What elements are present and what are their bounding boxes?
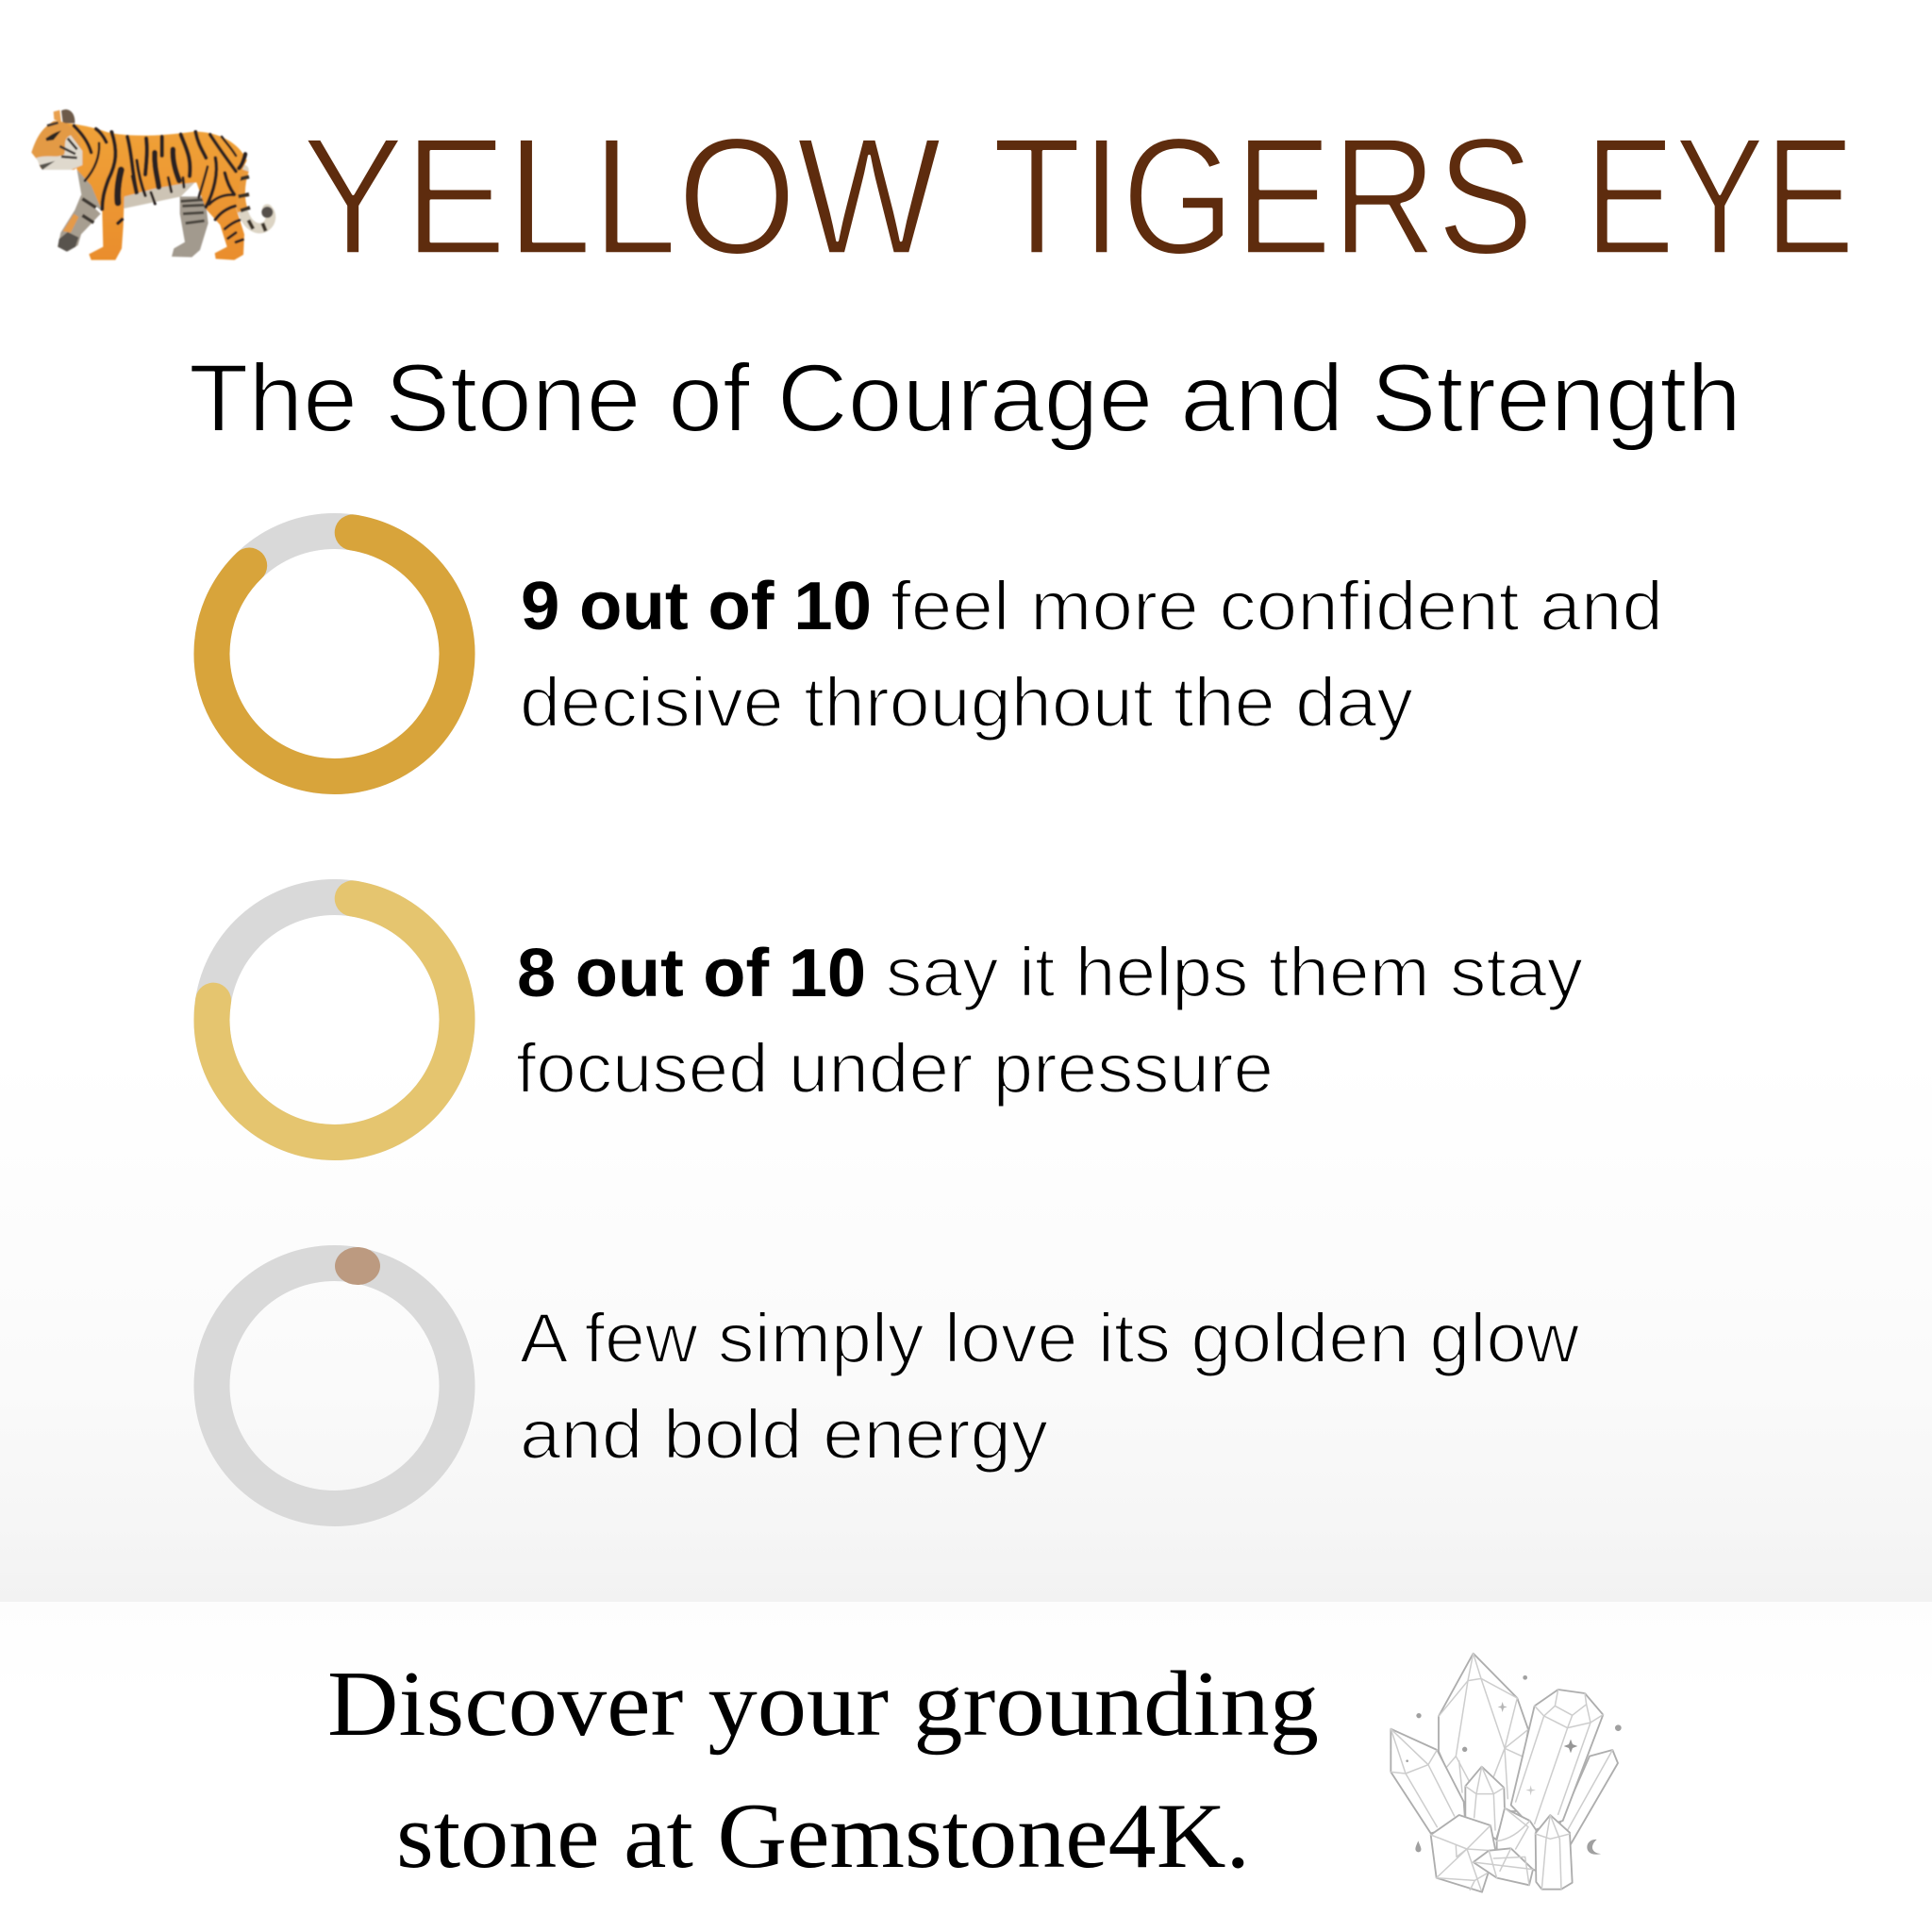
panel: stat a few [211,1247,1580,1508]
subtitle: The Stone of Courage and Strength [189,344,1741,452]
icon: crystal cluster [1391,1654,1622,1892]
call to action text: stone at Gemstone4K. [396,1785,1250,1888]
title: YELLOW [302,103,941,290]
title: TIGERS [992,103,1534,290]
panel: stat 8 out of 10 [195,880,1583,1159]
stat text: a few: and bold energy [520,1395,1048,1474]
panel: stat 9 out of 10 [195,514,1663,793]
stat text: 9 out of 10: feel more confident and [891,567,1663,645]
stat text: 9 out of 10 [520,567,1663,741]
title [302,103,1855,290]
stat text: 8 out of 10: focused under pressure [516,1029,1274,1108]
stat text: a few: A few simply love its golden glow [520,1299,1580,1377]
donut chart: a few [211,1247,457,1508]
title: EYE [1585,103,1855,290]
icon: tiger [31,109,273,260]
donut chart: 8 out of 10 [195,880,474,1159]
donut chart: 9 out of 10 [195,514,474,793]
call to action text: Discover your grounding [327,1653,1319,1756]
stat text: 8 out of 10: say it helps them stay [886,933,1583,1011]
stat text: 8 out of 10 [516,933,1583,1108]
stat text: 8 out of 10: 8 out of 10 [517,936,866,1011]
stat text: a few [520,1299,1580,1474]
call to action text [327,1653,1319,1888]
stat text: 9 out of 10: decisive throughout the day [520,663,1413,741]
stat text: 9 out of 10: 9 out of 10 [521,569,872,644]
